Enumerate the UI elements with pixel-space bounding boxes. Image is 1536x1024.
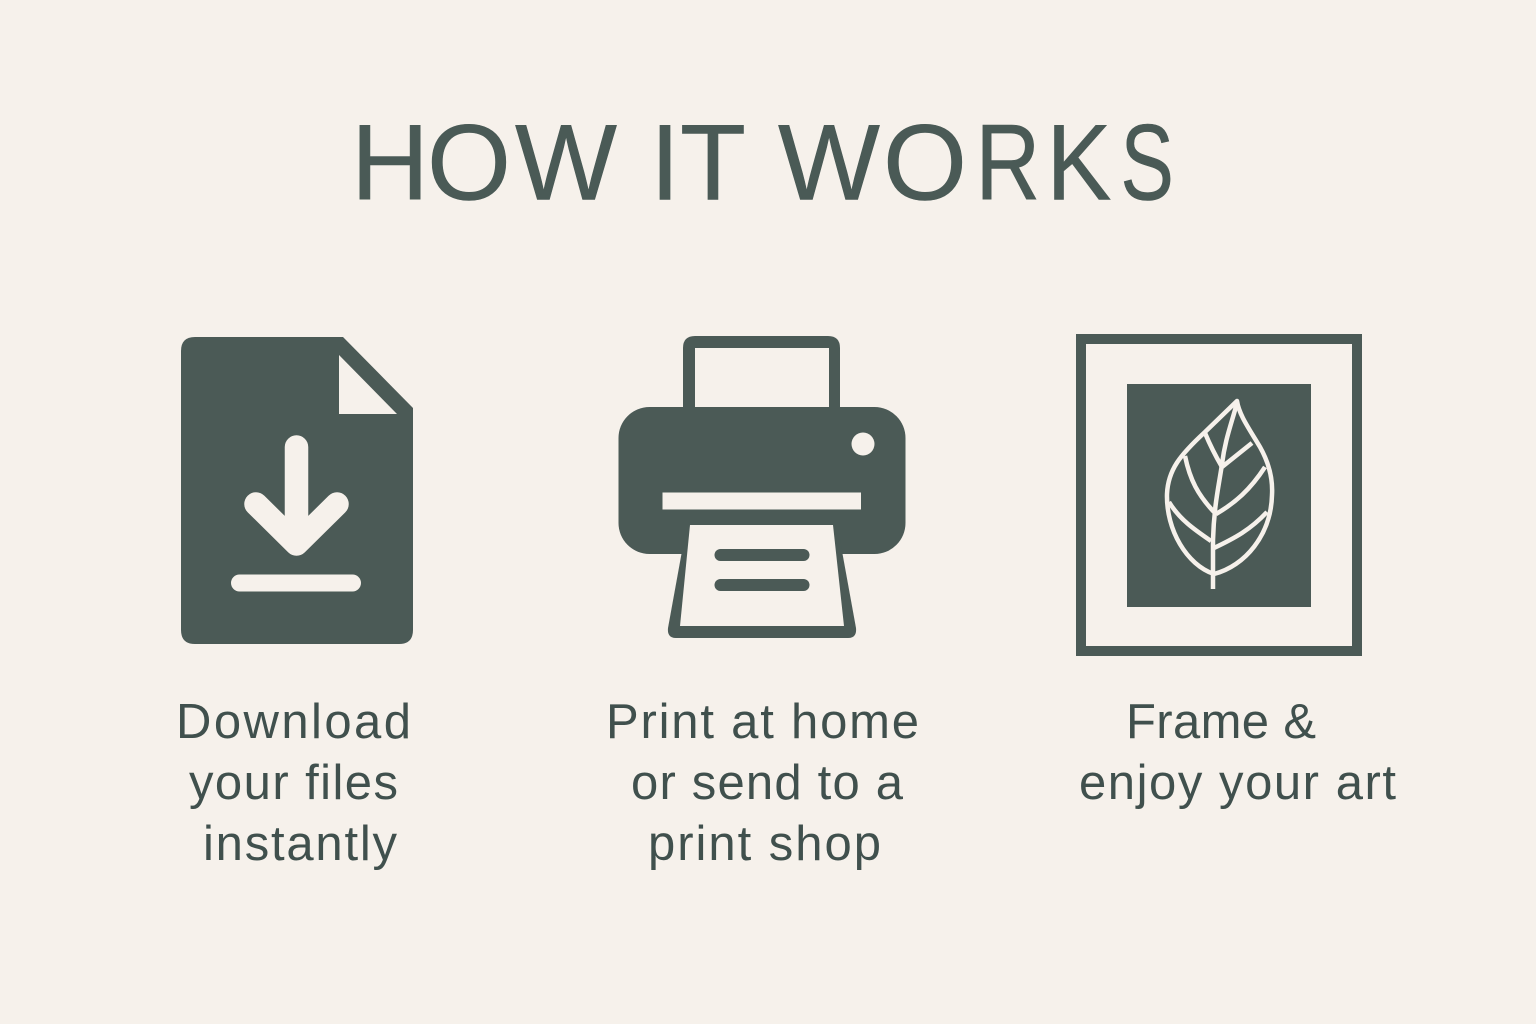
icon: framed leaf art — [1081, 339, 1357, 651]
title: HOW IT WO — [351, 102, 967, 222]
icon: download file — [181, 337, 413, 644]
caption: step 2 — [606, 695, 919, 871]
caption: step 3: enjoy your art — [1079, 756, 1396, 810]
caption: step 2: print shop — [648, 817, 881, 871]
title: S — [1120, 103, 1174, 223]
title: K — [1046, 102, 1111, 223]
caption: step 2: or send to a — [631, 756, 904, 810]
icon: printer — [618, 336, 906, 638]
caption: step 3: Frame & — [1126, 695, 1316, 749]
caption: step 1: Download — [176, 695, 411, 749]
title: R — [976, 103, 1040, 223]
caption: step 2: Print at home — [606, 695, 919, 749]
caption: step 1: instantly — [203, 817, 398, 871]
caption: step 1: your files — [189, 756, 398, 810]
caption: step 1 — [176, 695, 411, 871]
caption: step 3 — [1079, 695, 1396, 810]
